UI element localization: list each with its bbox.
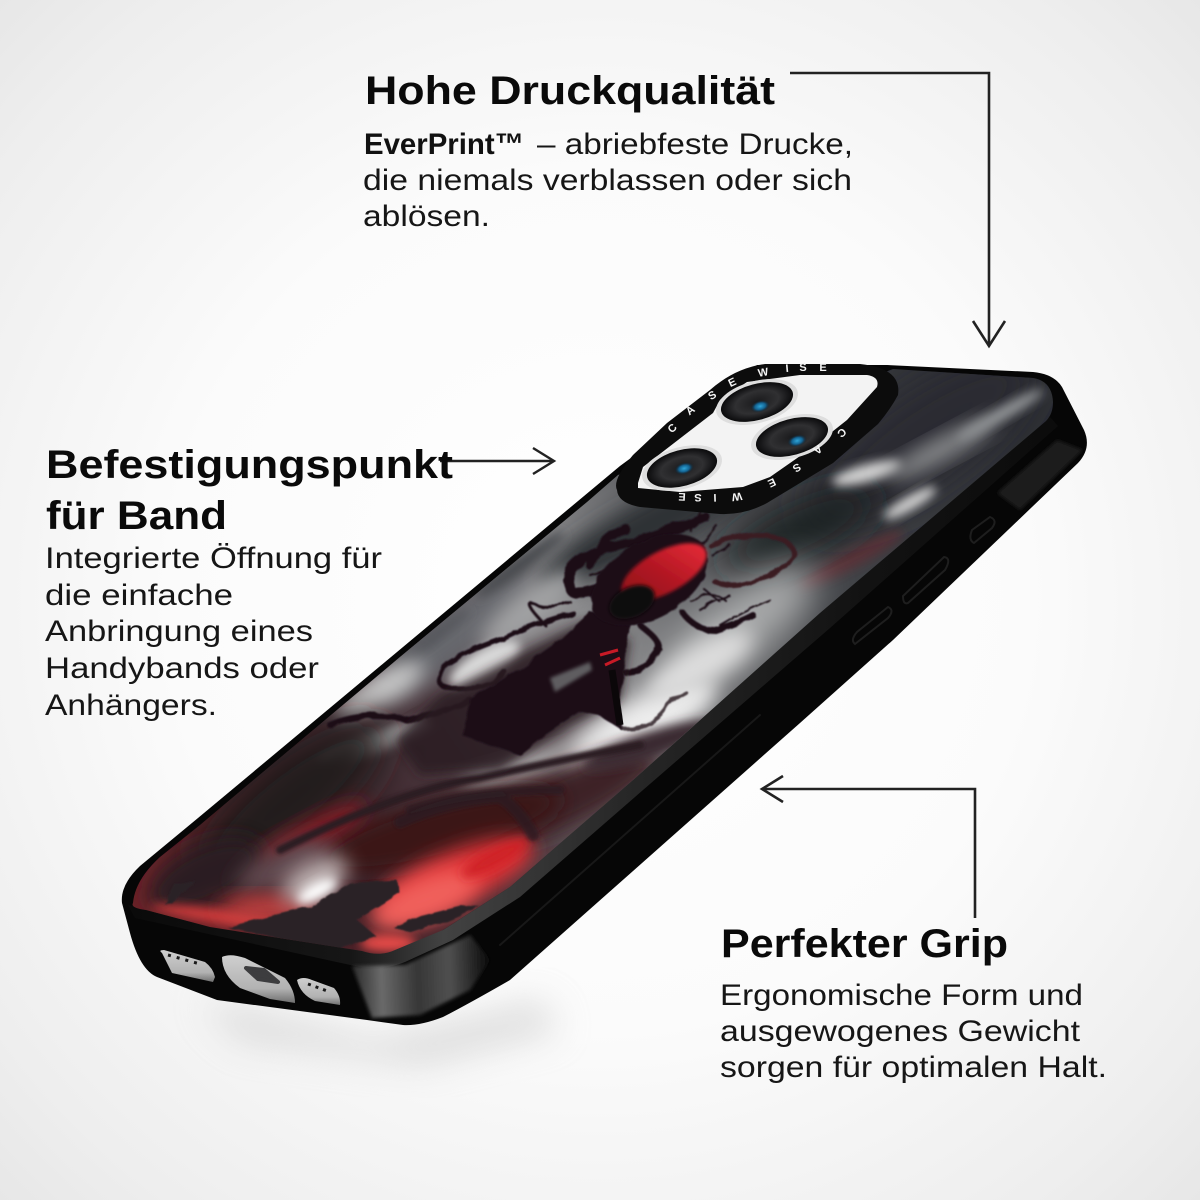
ring lettering: E [727,376,738,390]
phone shadow [200,1000,560,1065]
ring lettering: S [799,362,807,374]
arrow: grip [762,776,975,918]
heading: strap attachment: Befestigungspunkt [46,443,453,487]
right corner panel [997,440,1083,510]
text block: strap attachment [45,443,453,722]
lens: left [637,437,727,499]
foreground silhouettes [165,880,480,950]
heading: grip: Perfekter Grip [721,922,1008,966]
camera window [638,375,878,492]
description: strap attachment: Integrierte Öffnung für [45,542,382,575]
ring lettering [666,362,848,503]
description: strap attachment: Anhängers. [45,689,217,722]
description: strap attachment: Anbringung eines [45,615,313,648]
ring lettering: I [713,491,717,503]
description: print quality: die niemals verblassen oder sich [363,164,852,197]
corner sheen [352,935,490,1018]
arrow: print quality [790,73,1005,346]
camera island [616,362,898,514]
creature figure with red moon [395,515,724,775]
description: grip [720,979,1107,1084]
ring lettering: E [819,362,827,374]
description: print quality: EverPrint™ [364,128,524,161]
description: print quality [363,128,853,233]
heading: strap attachment [46,443,453,538]
ring lettering: S [790,460,803,474]
description: print quality: ablösen. [363,200,490,233]
text block: grip [720,922,1107,1084]
ring lettering: S [694,491,702,503]
case body [122,365,1087,1025]
soft dark bands [280,745,640,850]
description: grip: Ergonomische Form und [720,979,1083,1012]
side buttons [500,517,995,945]
ring lettering: C [666,422,680,436]
storm clouds [315,319,1063,794]
heading: strap attachment: für Band [46,494,227,538]
heading: print quality: Hohe Druckqualität [365,69,775,113]
ring lettering: I [785,363,789,375]
camera ring [616,364,898,514]
ring lettering: A [811,442,824,456]
ring lettering: E [678,490,686,502]
lens: right [746,406,838,468]
branching tentacles [330,510,793,728]
ring lettering: E [766,475,777,489]
charging port area [160,950,340,1005]
ring lettering: A [684,404,697,418]
USB-C port [222,955,295,1003]
ring lettering: S [706,389,719,403]
inner case lip [128,417,1058,968]
red and dark lower clouds [136,693,721,952]
phone with case [100,319,1100,1025]
ring lettering: C [834,425,848,439]
speaker grille left [160,950,215,982]
description: grip: ausgewogenes Gewicht [720,1015,1081,1048]
arrow: strap attachment [440,448,554,474]
description: grip: sorgen für optimalen Halt. [720,1051,1107,1084]
description: strap attachment: die einfache [45,579,233,612]
text block: print quality [363,69,853,233]
ring lettering: W [757,366,770,380]
speaker grille right [297,978,340,1005]
description: strap attachment: Handybands oder [45,652,319,685]
description: print quality: – abriebfeste Drucke, [537,128,853,161]
ring lettering: W [730,489,743,503]
lens: top [711,371,803,433]
description: strap attachment [45,542,382,722]
artwork on case back [132,369,1053,954]
